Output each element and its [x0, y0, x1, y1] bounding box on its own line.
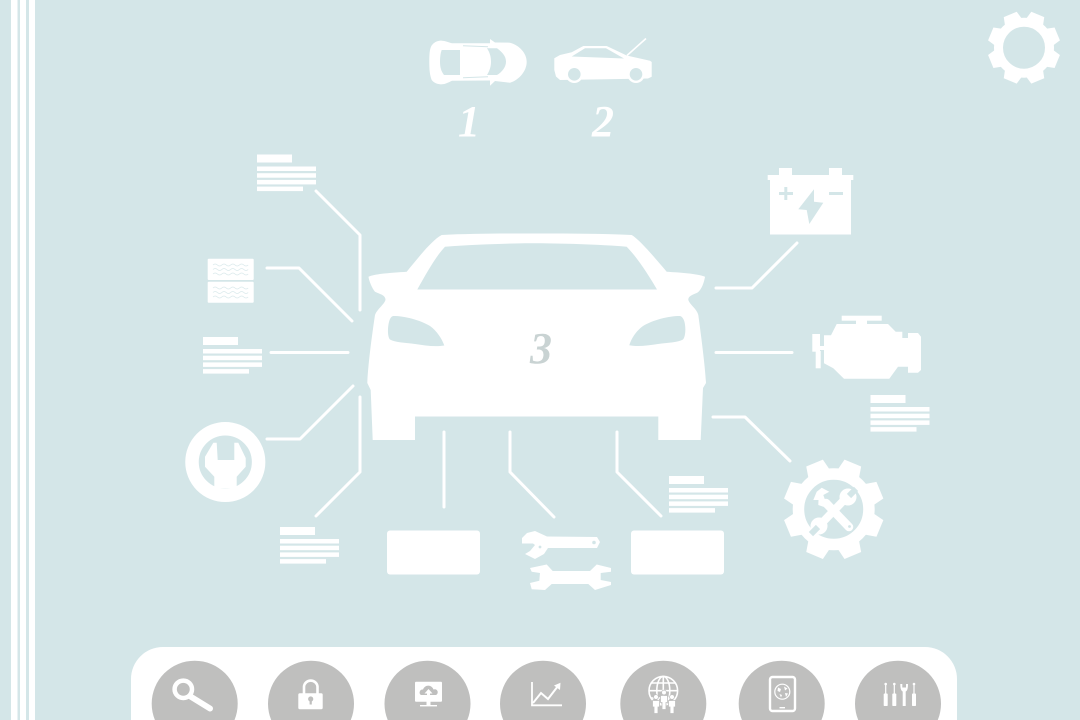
- text placeholder block lower left: [280, 527, 339, 564]
- icon: monitor with cloud upload: [384, 661, 470, 720]
- number 2: 2: [591, 97, 614, 146]
- icon: screwdrivers and wrench: [855, 661, 941, 720]
- icon: car side view with open hood: [554, 38, 652, 83]
- icon: wrench in circle: [192, 429, 259, 495]
- text placeholder block left: [203, 337, 262, 374]
- number 1: 1: [458, 97, 480, 146]
- text placeholder block top left: [257, 154, 316, 191]
- panel: blank box left: [387, 530, 480, 574]
- icon: wrench and spanner: [522, 531, 611, 590]
- icon: settings gear top right: [987, 11, 1061, 85]
- icon: air filter: [208, 259, 254, 303]
- text placeholder block lower centre right: [669, 476, 728, 513]
- icon: engine: [812, 316, 921, 379]
- icon: car top view: [429, 39, 527, 86]
- icon: gear with crossed tools: [783, 459, 884, 560]
- icon: line chart: [500, 661, 586, 720]
- car front view: [367, 234, 706, 440]
- icon: globe with people: [620, 661, 706, 720]
- icon: tablet with globe: [739, 661, 825, 720]
- icon: magnifier: [152, 661, 238, 720]
- text placeholder block right: [870, 395, 930, 432]
- icon: padlock: [268, 661, 354, 720]
- icon: car battery: [768, 168, 853, 234]
- panel: bottom icon bar: [131, 647, 957, 720]
- connector lines: [267, 191, 797, 517]
- number 3: 3: [529, 324, 552, 373]
- panel: blank box right: [631, 530, 724, 574]
